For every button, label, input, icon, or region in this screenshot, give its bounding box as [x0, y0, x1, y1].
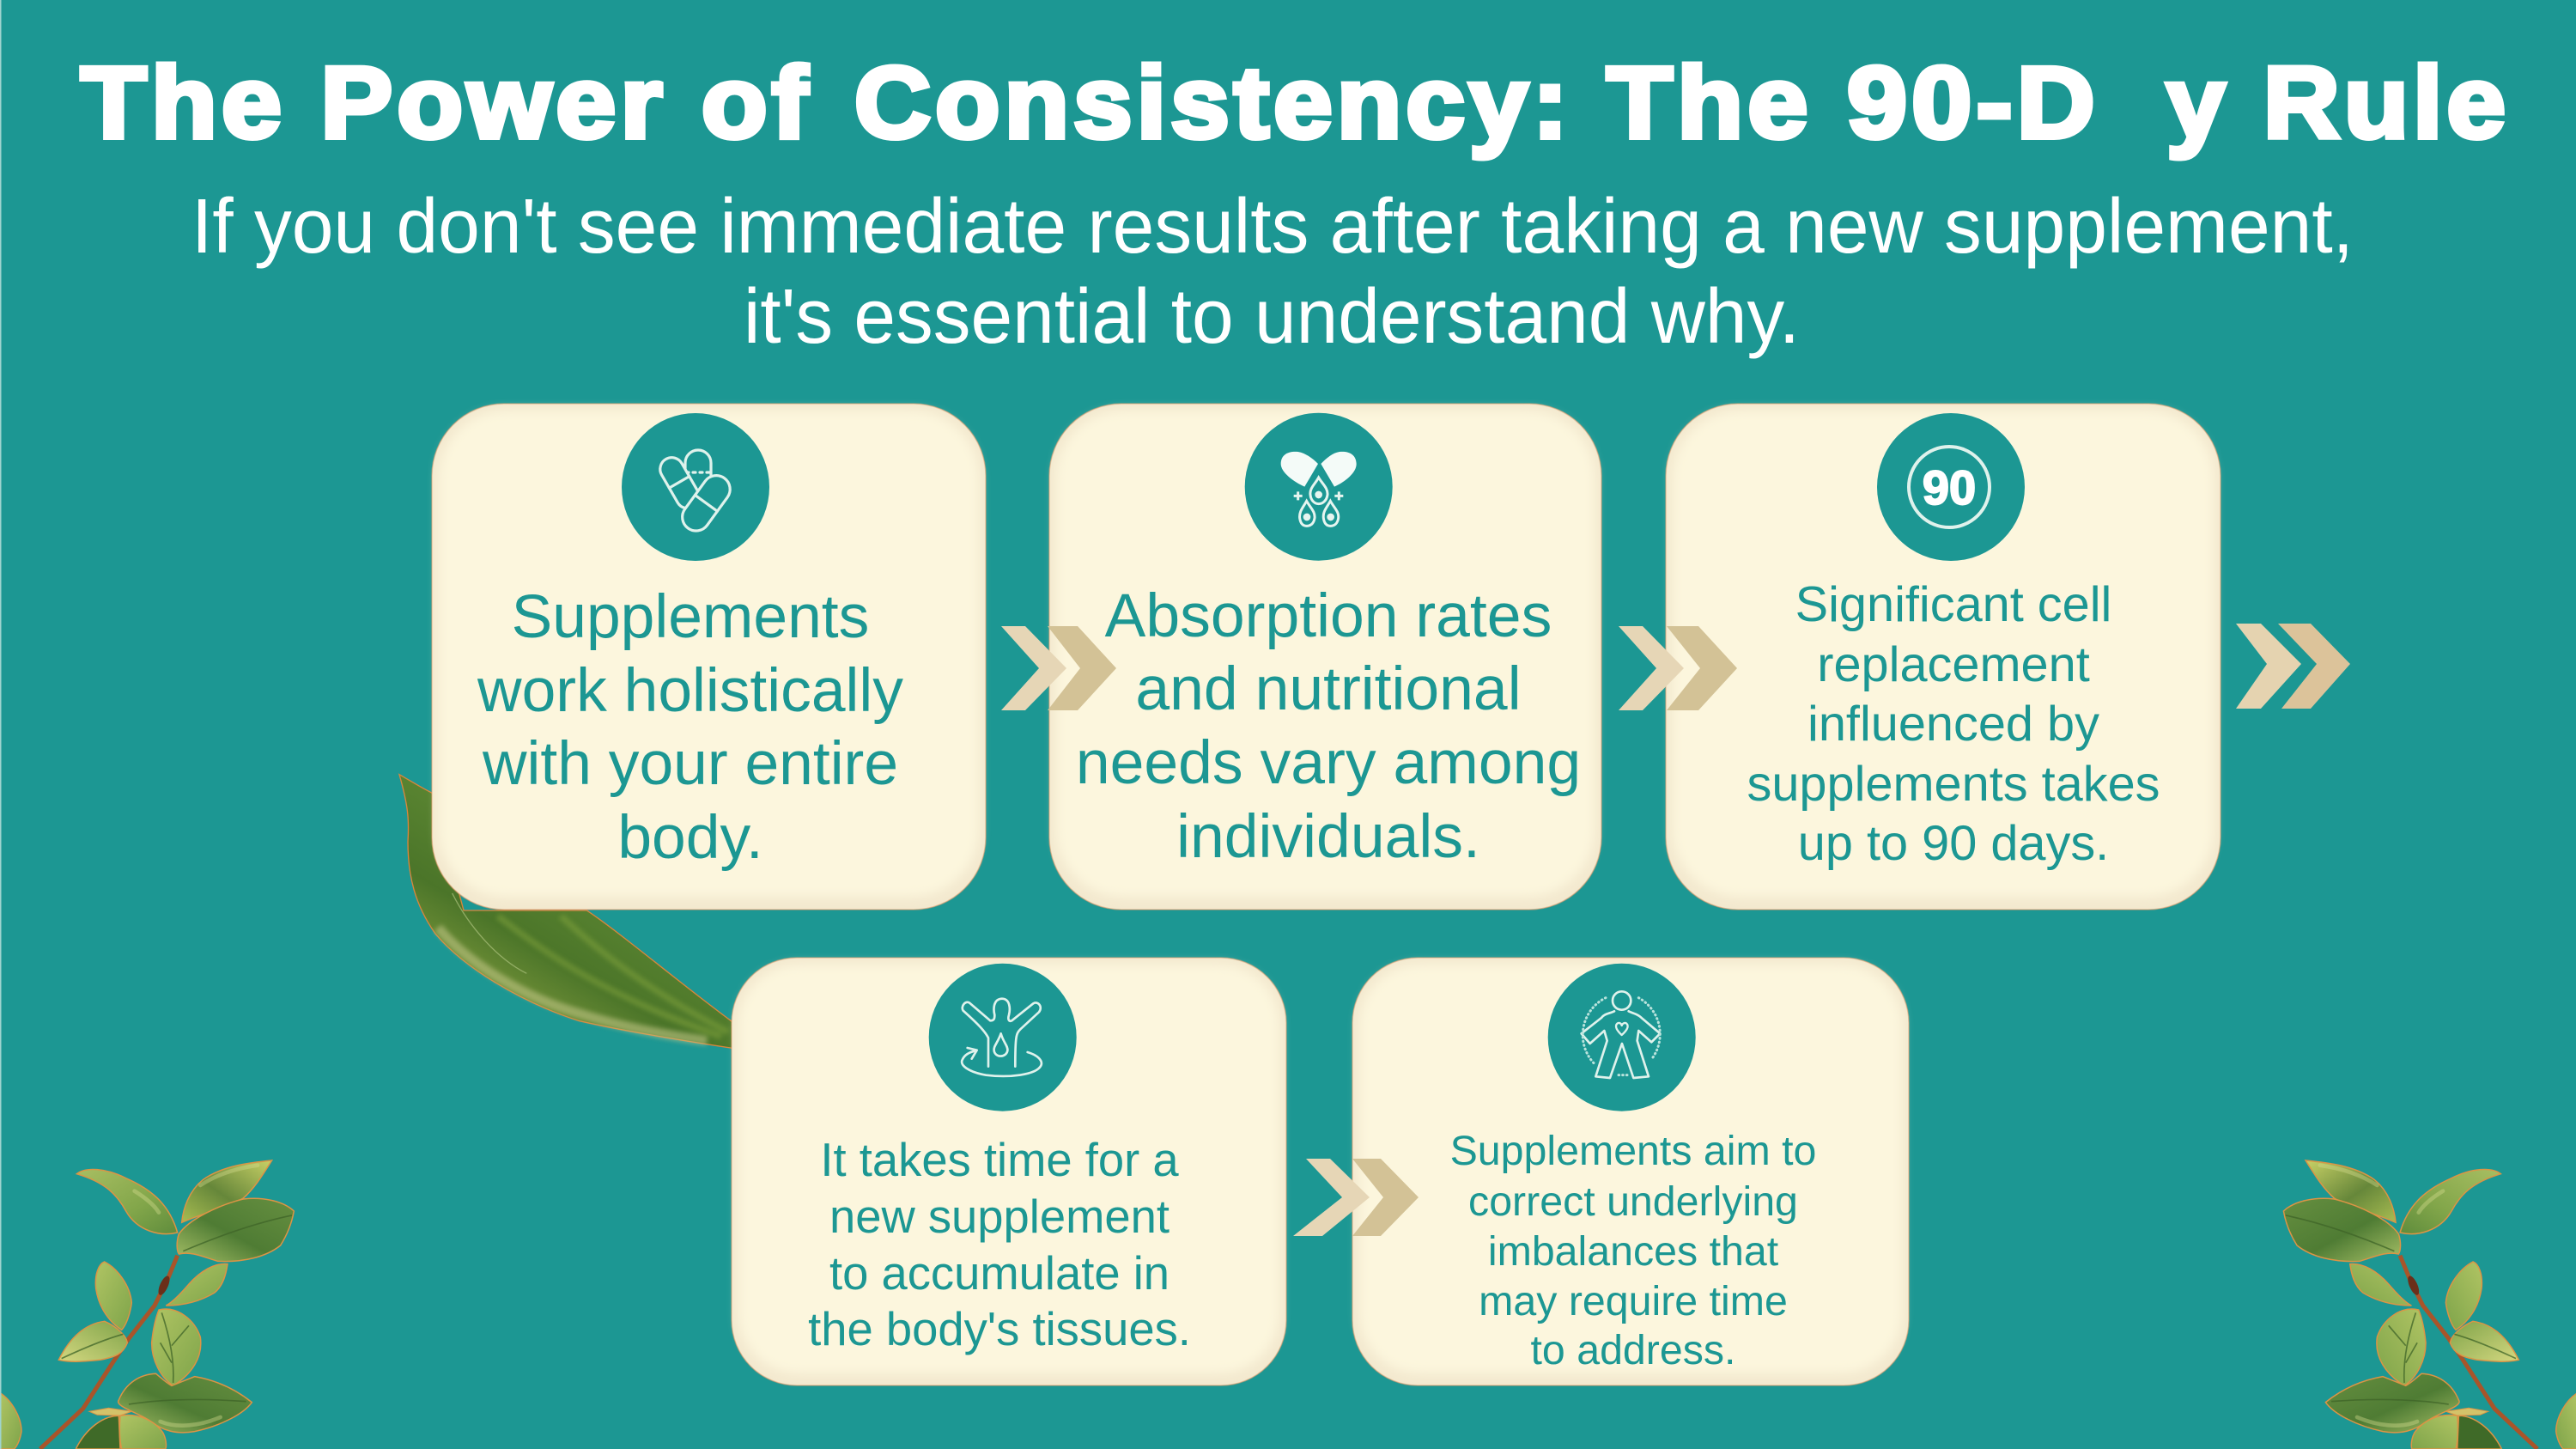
icon: 90 badge: 90: [1923, 460, 1976, 514]
title: The Power of: [81, 46, 812, 160]
text: card 1: with your entire: [482, 729, 898, 798]
subtitle: If you don't see immediate results after taking a new supplement,: [191, 184, 2354, 270]
branch: bottom right: [2283, 1160, 2576, 1449]
arrow: card 3 onward: [2236, 624, 2350, 709]
left edge line: [0, 0, 2, 1449]
text: card 5: to address.: [1531, 1327, 1735, 1373]
title: The 90-D: [1607, 46, 2099, 160]
text: card 2: [1076, 581, 1581, 871]
icon: opened capsule with drops: [1245, 413, 1393, 561]
text: card 3: influenced by: [1807, 697, 2099, 752]
text: card 2: Absorption rates: [1105, 581, 1552, 650]
panel: card 4: [732, 958, 1286, 1385]
text: card 4: It takes time for a: [820, 1134, 1179, 1186]
arrow: card 2 to card 3: [1619, 626, 1737, 710]
text: card 2: individuals.: [1176, 802, 1480, 871]
text: card 1: [477, 582, 903, 872]
icon: body with heart: [1548, 964, 1696, 1111]
panel: card 5: [1352, 958, 1909, 1385]
text: card 3: supplements takes: [1747, 757, 2160, 812]
text: card 5: correct underlying: [1468, 1178, 1798, 1225]
text: card 3: replacement: [1817, 637, 2090, 692]
icon: capsules: [622, 413, 769, 561]
title: Consistency:: [854, 46, 1572, 160]
subtitle: it's essential to understand why.: [744, 274, 1800, 360]
text: card 4: to accumulate in: [829, 1247, 1170, 1300]
text: card 5: may require time: [1479, 1278, 1788, 1324]
text: card 3: Significant cell: [1795, 577, 2111, 632]
text: card 5: imbalances that: [1488, 1228, 1779, 1275]
text: card 4: new supplement: [829, 1190, 1170, 1243]
text: card 1: Supplements: [512, 582, 869, 651]
panel: card 3: [1666, 404, 2221, 910]
text: card 5: [1450, 1128, 1816, 1373]
arrow: card 1 to card 2: [1001, 626, 1116, 710]
text: card 4: the body's tissues.: [808, 1303, 1191, 1355]
large leaf behind first card: [399, 775, 734, 1049]
icon: 90 badge: [1877, 413, 2025, 561]
text: card 3: [1747, 577, 2160, 871]
arrow: card 4 to card 5: [1293, 1159, 1419, 1236]
text: card 4: [808, 1134, 1191, 1355]
title: [81, 46, 2510, 160]
subtitle: [191, 184, 2354, 360]
icon: person with drop: [929, 964, 1077, 1111]
text: card 5: Supplements aim to: [1450, 1128, 1816, 1174]
panel: card 2: [1049, 404, 1601, 910]
text: card 2: and nutritional: [1135, 654, 1522, 723]
branch: bottom left: [0, 1160, 294, 1449]
text: card 3: up to 90 days.: [1798, 816, 2109, 871]
text: card 2: needs vary among: [1076, 728, 1581, 797]
text: card 1: work holistically: [477, 656, 903, 725]
title: y Rule: [2166, 46, 2510, 160]
text: card 1: body.: [617, 803, 763, 872]
panel: card 1: [432, 404, 986, 910]
